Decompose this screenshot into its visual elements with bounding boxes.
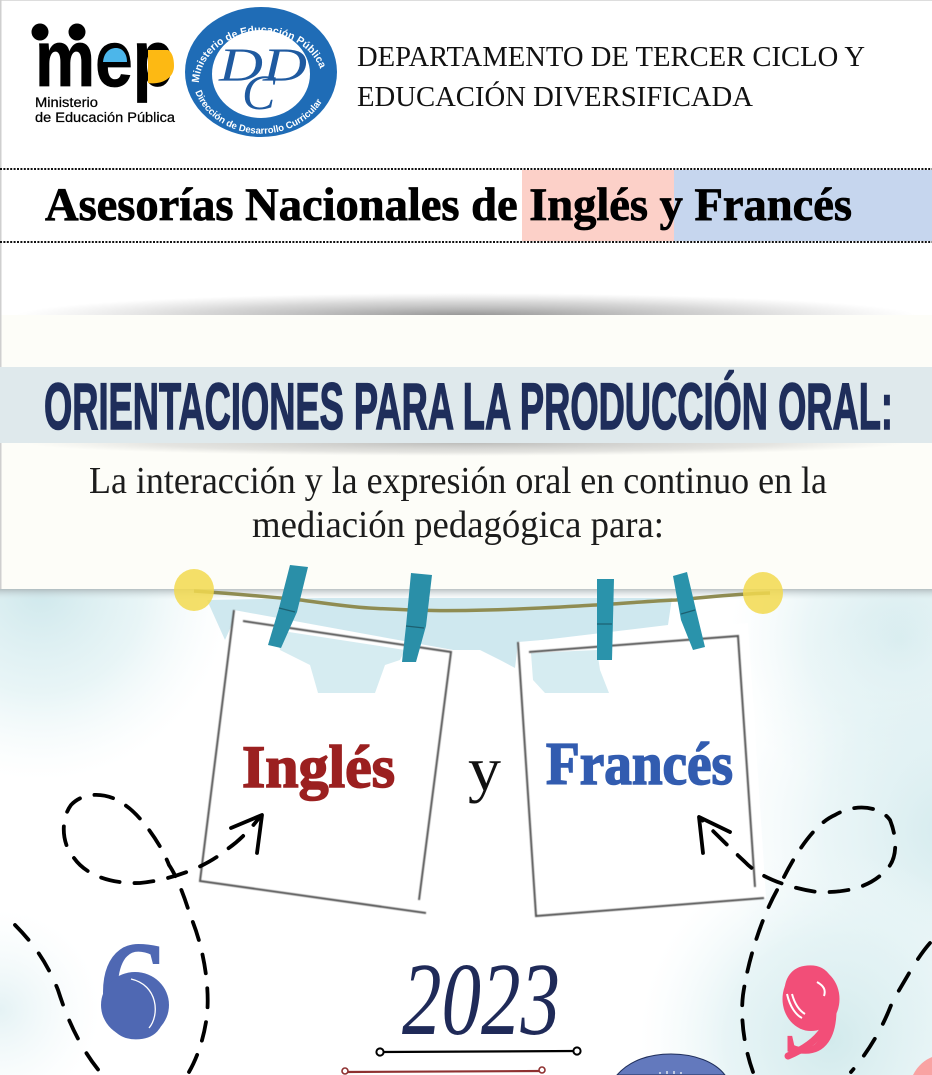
title band bbox=[0, 367, 932, 443]
watercolor seen through card bbox=[276, 630, 405, 693]
yellow pin left bbox=[174, 569, 214, 611]
decorative line black bbox=[376, 1047, 581, 1056]
conjunction y: y bbox=[468, 736, 501, 804]
logo: Dirección de Desarrollo Curricular seal: Dirección de Desarrollo Curricular bbox=[195, 90, 322, 134]
label: Francés: Francés bbox=[546, 731, 733, 797]
pink circle bottom right bbox=[913, 1057, 932, 1075]
lower panel background bbox=[0, 589, 932, 1075]
heading: department: DEPARTAMENTO DE TERCER CICLO Y bbox=[357, 41, 865, 73]
banner: Asesorías Nacionales: Asesorías Nacionales de Inglés y Francés bbox=[45, 179, 852, 231]
clothesline bbox=[174, 565, 783, 662]
clothespin 2 bbox=[402, 573, 432, 662]
clothespin 3 bbox=[597, 579, 614, 660]
logo: mep: de Educación Pública bbox=[35, 110, 176, 125]
subtitle: mediación pedagógica para: bbox=[252, 504, 664, 546]
heading: department bbox=[357, 41, 865, 113]
logo: Dirección de Desarrollo Curricular seal: DD bbox=[218, 39, 307, 92]
blue circle bottom bbox=[617, 1054, 725, 1075]
year 2023: 2023 bbox=[402, 942, 560, 1057]
band shadow bbox=[76, 443, 856, 454]
subtitle: La interacción y la expresión oral en continuo en la bbox=[89, 460, 827, 502]
dashed arrow right bbox=[699, 808, 895, 1072]
logo: mep bbox=[32, 14, 176, 125]
header logos bbox=[32, 7, 337, 137]
logo: mep: Ministerio bbox=[35, 95, 98, 110]
yellow pin right bbox=[743, 572, 783, 614]
heading: department: EDUCACIÓN DIVERSIFICADA bbox=[357, 80, 753, 113]
clothespin 1 bbox=[268, 565, 308, 648]
dashed arrow left bbox=[64, 795, 262, 1072]
watercolor seen through card bbox=[531, 650, 609, 693]
logo: mep: mep bbox=[35, 14, 174, 103]
clothespin 4 bbox=[673, 572, 705, 650]
decorative line red bbox=[342, 1067, 545, 1074]
subtitle bbox=[89, 460, 827, 546]
dashed line far left bbox=[15, 925, 100, 1072]
watercolor patch bbox=[207, 598, 672, 668]
rope bbox=[194, 591, 770, 611]
label: Inglés: Inglés bbox=[242, 734, 395, 800]
logo: Dirección de Desarrollo Curricular seal: Ministerio de Educación Pública bbox=[192, 26, 324, 82]
logo: Dirección de Desarrollo Curricular seal bbox=[185, 7, 337, 137]
photo card: Inglés bbox=[200, 610, 453, 913]
logo: Dirección de Desarrollo Curricular seal: C bbox=[242, 64, 276, 120]
banner: Asesorías Nacionales bbox=[0, 169, 932, 242]
photo card: Francés bbox=[518, 623, 766, 918]
decorative number 6: 6 bbox=[98, 914, 168, 1068]
dashed line far right bbox=[851, 943, 930, 1072]
panel shadow bbox=[58, 295, 873, 315]
